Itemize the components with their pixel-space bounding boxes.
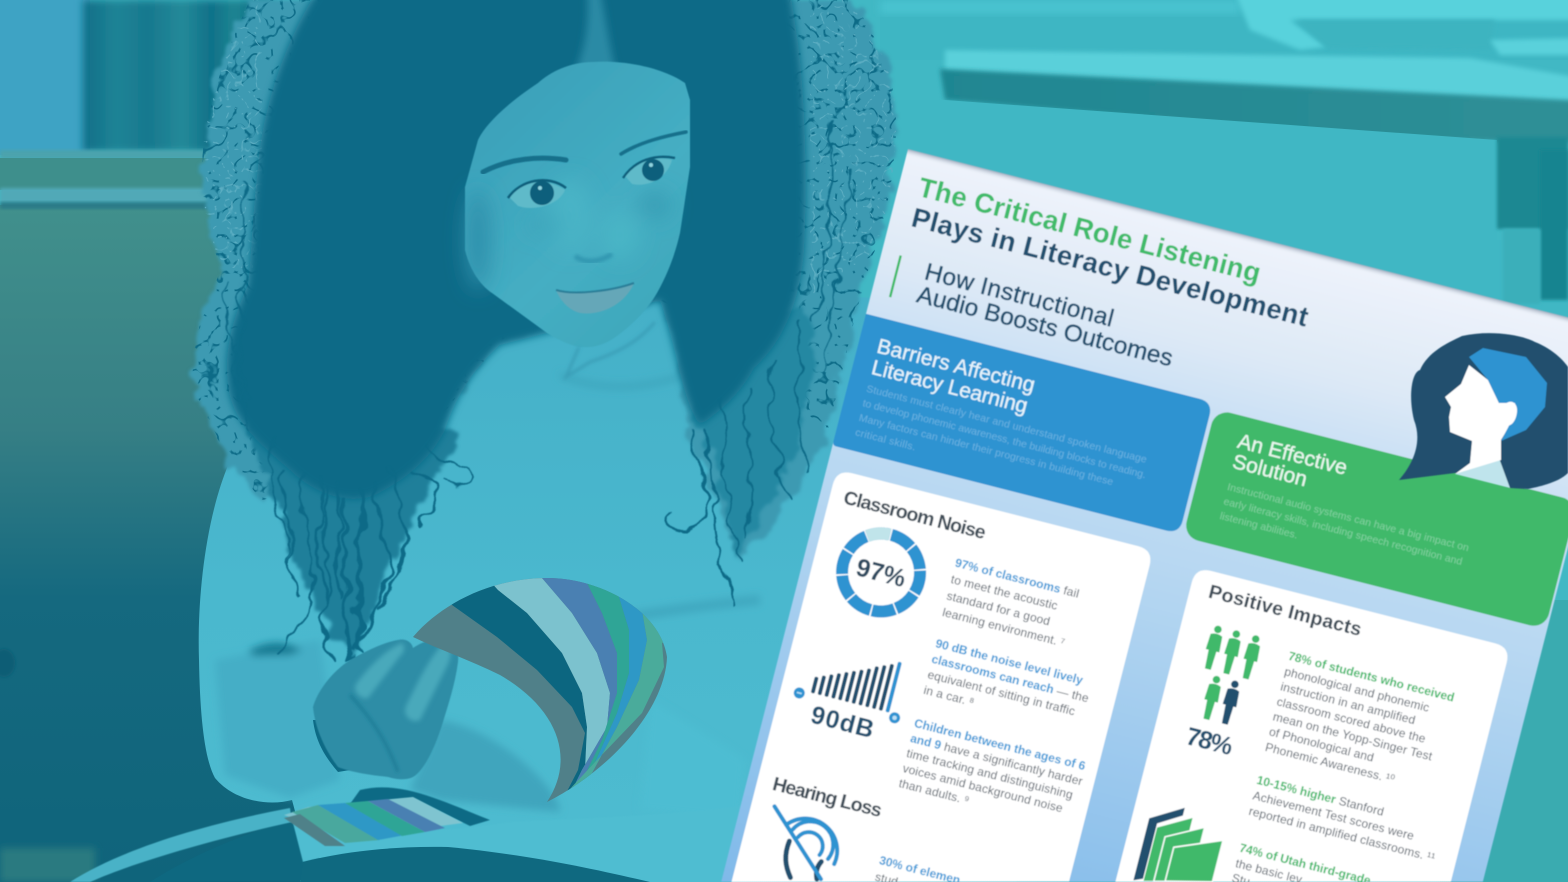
hair parting: [576, 0, 616, 64]
text: children in noise: [897, 716, 1088, 834]
shirt collar: [1455, 458, 1510, 488]
blue stripe: [592, 597, 647, 774]
text: children in noise: than adults. ⁹: [897, 776, 971, 808]
subtitle: How Instructional: [922, 258, 1117, 333]
panel: an effective solution: early literacy skills, including speech recognition and: [1222, 496, 1464, 568]
panel: barriers affecting literacy learning: to develop phonemic awareness, the building blocks to reading.: [861, 397, 1147, 481]
panel: an effective solution: [1183, 409, 1568, 629]
text: noise level: 90 dB the noise level lively: [934, 636, 1085, 687]
panel: an effective solution: Instructional audio systems can have a big impact on: [1226, 481, 1470, 554]
icon: head in speech bubble: [1399, 333, 1568, 489]
second green stripe: [570, 614, 664, 788]
light stripe: [494, 578, 610, 786]
text: achievement scores: 10-15% higher Stanford: [1255, 773, 1386, 819]
infographic document, tilted: [721, 149, 1568, 882]
speech bubble: [1399, 333, 1568, 489]
text: noise level: equivalent of sitting in traffic: [926, 667, 1077, 718]
panel: an effective solution: Solution: [1230, 450, 1309, 491]
stat: 78%: 78%: [1183, 722, 1236, 761]
collar: [566, 322, 655, 377]
curtain: [83, 0, 273, 152]
text: achievement scores: Achievement Test scores were: [1251, 788, 1416, 843]
subtitle accent bar: [889, 255, 902, 297]
sweatshirt: [198, 465, 818, 830]
panel: barriers affecting literacy learning: Literacy Learning: [869, 356, 1030, 418]
panel: barriers affecting literacy learning: critical skills.: [854, 426, 917, 453]
text: classroom acoustics: learning environment. ⁷: [941, 605, 1066, 650]
couch body: [0, 205, 300, 882]
text: phonological instruction: 78% of students who received: [1287, 649, 1456, 705]
panel: classroom noise and hearing loss card: [731, 469, 1154, 882]
text: children in noise: and 9 have a significantly harder: [909, 731, 1084, 788]
ear: [1503, 402, 1517, 426]
photo: girl reading a book: [70, 0, 920, 882]
hair halo: [193, 0, 896, 560]
chart: 97% donut: 97%: [853, 554, 909, 593]
face shading: [458, 195, 664, 290]
text: classroom acoustics: to meet the acoustic: [949, 572, 1059, 613]
curled coloured page: [413, 578, 667, 802]
text: phonological instruction: of Phonological and: [1268, 725, 1375, 765]
shelves at upper right: [880, 0, 1568, 330]
panel: an effective solution: An Effective: [1235, 430, 1349, 480]
sheet top edge shadow: [906, 149, 1568, 338]
light curl texture on the halo: [202, 0, 896, 300]
lips: [556, 283, 634, 313]
text: children in noise: voices amid background noise: [901, 761, 1065, 815]
backdrop at lower right: [1440, 600, 1568, 882]
dark stripe: [452, 586, 587, 790]
document sheet: [721, 149, 1568, 882]
title: Plays in Literacy Development: [909, 202, 1312, 332]
coloured stripes on book page: [284, 797, 463, 846]
text: phonological instruction: [1264, 649, 1456, 796]
text: noise level: classrooms can reach — the: [930, 652, 1091, 705]
panel: positive impacts card: [1115, 567, 1511, 882]
face silhouette: [1445, 365, 1515, 474]
rust stripe: [413, 578, 667, 802]
heading: classroom noise: Classroom Noise: [841, 487, 988, 544]
panel: barriers affecting literacy learning: [832, 314, 1213, 534]
hair curl texture on the halo: [193, 0, 896, 500]
text: noise level: in a car. ⁸: [922, 683, 976, 709]
chart: 97% donut: [815, 506, 947, 639]
icon: stack of books: [1133, 800, 1228, 882]
title: The Critical Role Listening: [915, 171, 1264, 288]
text: phonological instruction: classroom scored above the: [1275, 694, 1427, 746]
sweatshirt shading and folds: [218, 596, 758, 812]
icon: 90 dB volume bars: [786, 640, 913, 750]
green stripe: [587, 584, 629, 770]
text: classroom acoustics: [941, 556, 1081, 650]
text: phonological instruction: instruction in an amplified: [1279, 679, 1417, 727]
couch top cushion: [0, 148, 209, 210]
text: phonological instruction: Phonemic Awareness. ¹⁰: [1264, 740, 1396, 787]
subtitle: Audio Boosts Outcomes: [914, 281, 1176, 372]
eyebrows: [483, 132, 686, 172]
text: phonological instruction: phonological and phonemic: [1283, 664, 1431, 715]
icon: crossed-out ear: [758, 800, 856, 882]
text: classroom acoustics: standard for a good: [945, 589, 1052, 629]
text: children in noise: Children between the ages of 6: [913, 716, 1087, 773]
eyes: [508, 157, 675, 208]
text: noise level: [922, 636, 1094, 736]
icon: five people, four highlighted: [1189, 624, 1263, 728]
icon: 90 dB volume bars: 90dB: [808, 701, 877, 744]
floor strip at lower left: [0, 848, 95, 882]
text: children in noise: time tracking and distinguishing: [905, 746, 1074, 802]
curly hair strands: [225, 120, 850, 660]
text: classroom acoustics: 97% of classrooms fail: [954, 556, 1081, 601]
text: phonological instruction: mean on the Yopp-Singer Test: [1271, 709, 1434, 764]
face: [465, 62, 690, 347]
nose: [575, 254, 612, 261]
heading: positive impacts: Positive Impacts: [1206, 581, 1364, 641]
sleeve cuff and hand: [313, 638, 458, 779]
hair dark mass: [227, 0, 806, 499]
open book on lap: [70, 786, 650, 882]
couch button: [0, 649, 15, 677]
text: achievement scores: reported in amplified classrooms. ¹¹: [1247, 804, 1437, 865]
panel: barriers affecting literacy learning: Barriers Affecting: [875, 335, 1037, 397]
panel: barriers affecting literacy learning: Students must clearly hear and understand spoken language: [865, 383, 1148, 466]
right hair mid-tone mass: [690, 300, 812, 560]
wall at upper left: [0, 0, 90, 155]
hair: [1469, 348, 1547, 441]
purple stripe: [542, 578, 617, 782]
panel: barriers affecting literacy learning: Many factors can hinder their progress in building these: [858, 412, 1115, 488]
panel: an effective solution: listening abilities.: [1219, 510, 1299, 542]
lower hair mid-tone mass: [244, 420, 460, 660]
heading: hearing loss: Hearing Loss: [770, 773, 884, 822]
text: achievement scores: [1247, 773, 1445, 865]
